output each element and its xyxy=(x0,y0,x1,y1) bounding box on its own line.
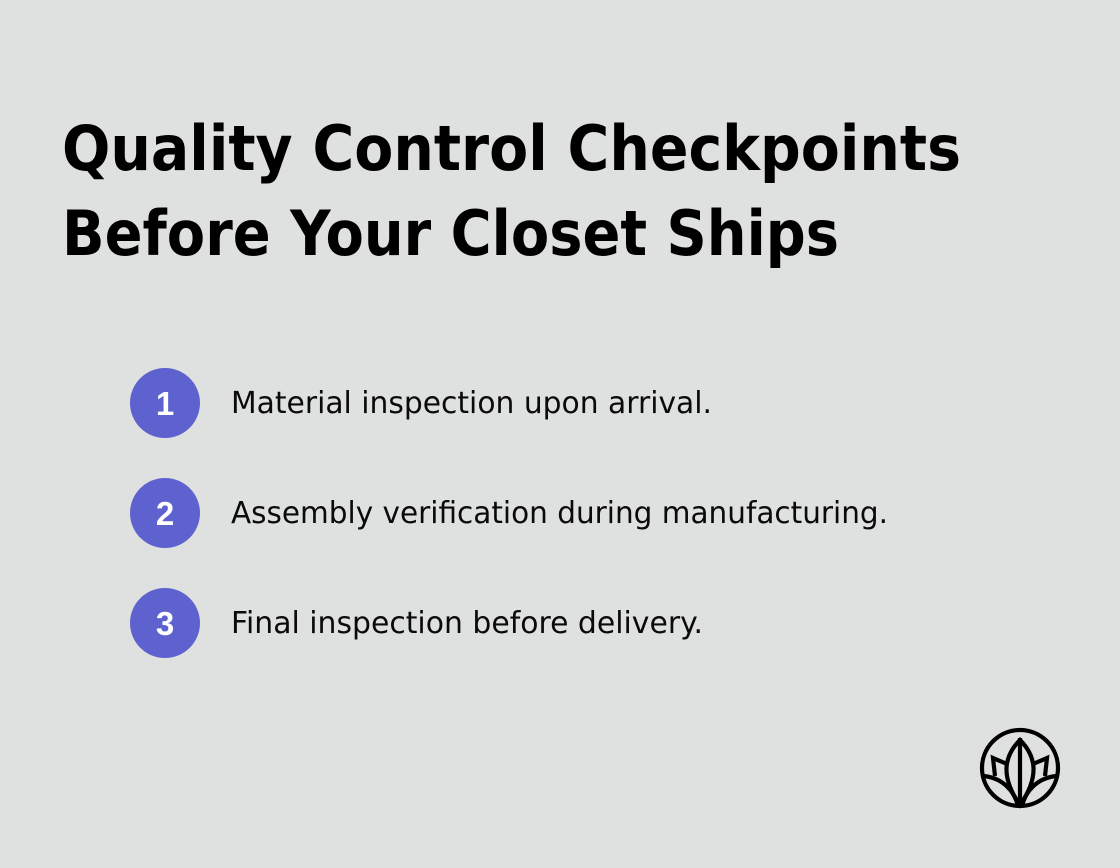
title: Before Your Closet Ships xyxy=(62,197,839,270)
title xyxy=(62,112,961,270)
title: Quality Control Checkpoints xyxy=(62,112,961,185)
number badge 3 xyxy=(130,588,200,658)
item text 1: Material inspection upon arrival. xyxy=(231,386,712,421)
icon: lotus logo xyxy=(982,730,1058,806)
item text 3: Final inspection before delivery. xyxy=(231,606,703,641)
checklist item 1 xyxy=(130,368,712,438)
number badge 1 xyxy=(130,368,200,438)
number badge 2: 2 xyxy=(156,495,174,532)
number badge 1: 1 xyxy=(156,385,174,422)
number badge 2 xyxy=(130,478,200,548)
number badge 3: 3 xyxy=(156,605,174,642)
checklist item 2 xyxy=(130,478,888,548)
checklist item 3 xyxy=(130,588,703,658)
item text 2: Assembly verification during manufacturing. xyxy=(231,496,888,531)
